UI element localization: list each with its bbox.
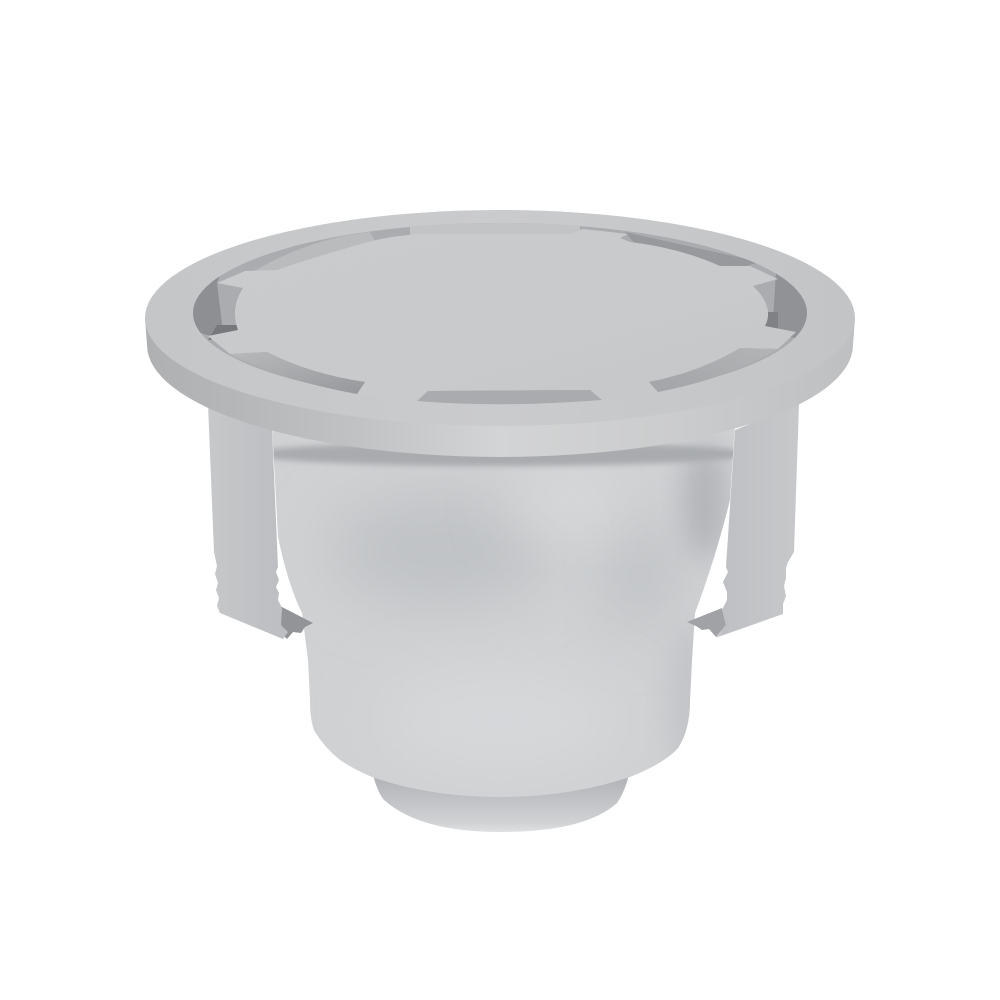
clip blade (208, 404, 288, 639)
clip tab (687, 608, 726, 637)
lower right lug shadow (649, 348, 778, 392)
tapered body (272, 428, 735, 797)
nozzle (372, 770, 630, 832)
opening well (193, 223, 807, 391)
left dark wall (193, 276, 222, 336)
product illustration (145, 210, 855, 832)
upper right gap shadow (625, 232, 756, 266)
top highlight band (410, 223, 580, 235)
right dark wall (774, 274, 807, 338)
right clip (687, 404, 799, 637)
clip blade (716, 404, 799, 637)
clip tab (278, 606, 313, 639)
flange side (145, 318, 855, 457)
lid with six lugs (208, 229, 796, 404)
lower left lug shadow (230, 352, 365, 394)
left clip (208, 404, 313, 639)
left notch shadow (208, 325, 240, 340)
flange top (145, 210, 855, 426)
right notch shadow (765, 312, 778, 328)
front lug shadow (417, 390, 602, 404)
upper left textured gap (256, 232, 374, 270)
